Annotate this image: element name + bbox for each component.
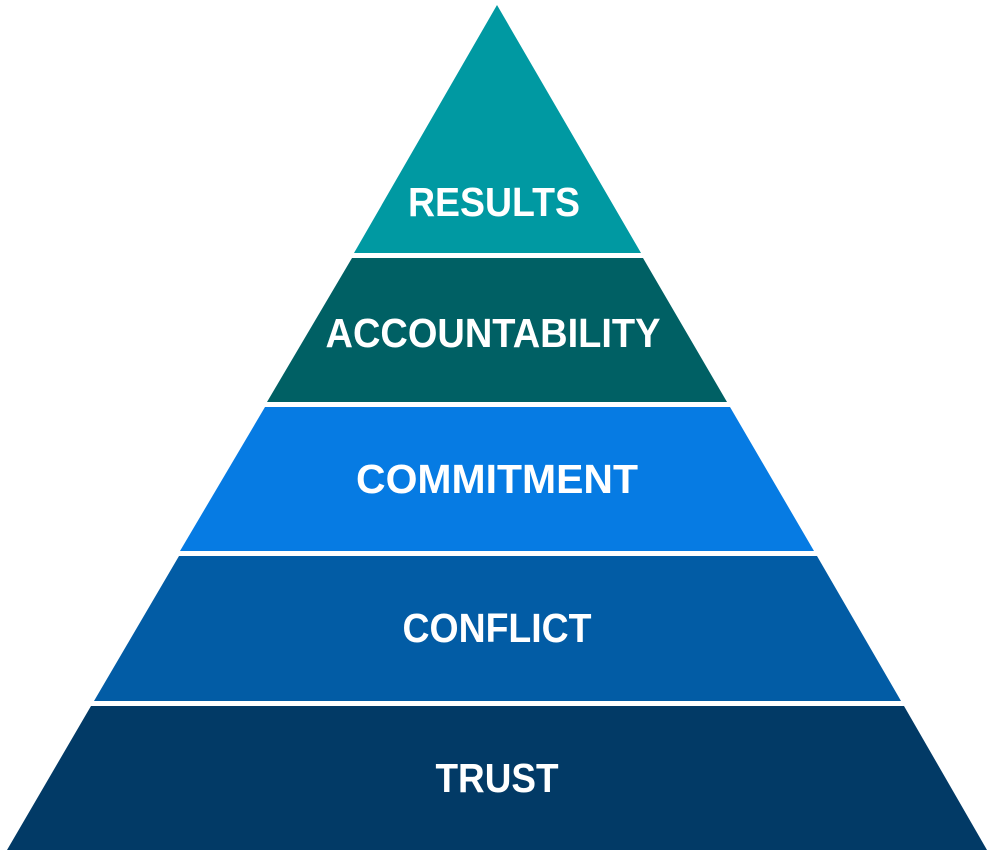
tier: trust: TRUST [436, 755, 559, 801]
tier: results: RESULTS [408, 179, 580, 225]
tier: conflict [94, 556, 901, 701]
tier: trust [7, 706, 987, 850]
tier: results [354, 5, 641, 253]
tier: commitment [180, 407, 814, 551]
tier: commitment: COMMITMENT [356, 456, 638, 502]
tier: conflict: CONFLICT [402, 605, 592, 651]
tier: accountability [267, 258, 727, 402]
tier: accountability: ACCOUNTABILITY [326, 310, 660, 356]
